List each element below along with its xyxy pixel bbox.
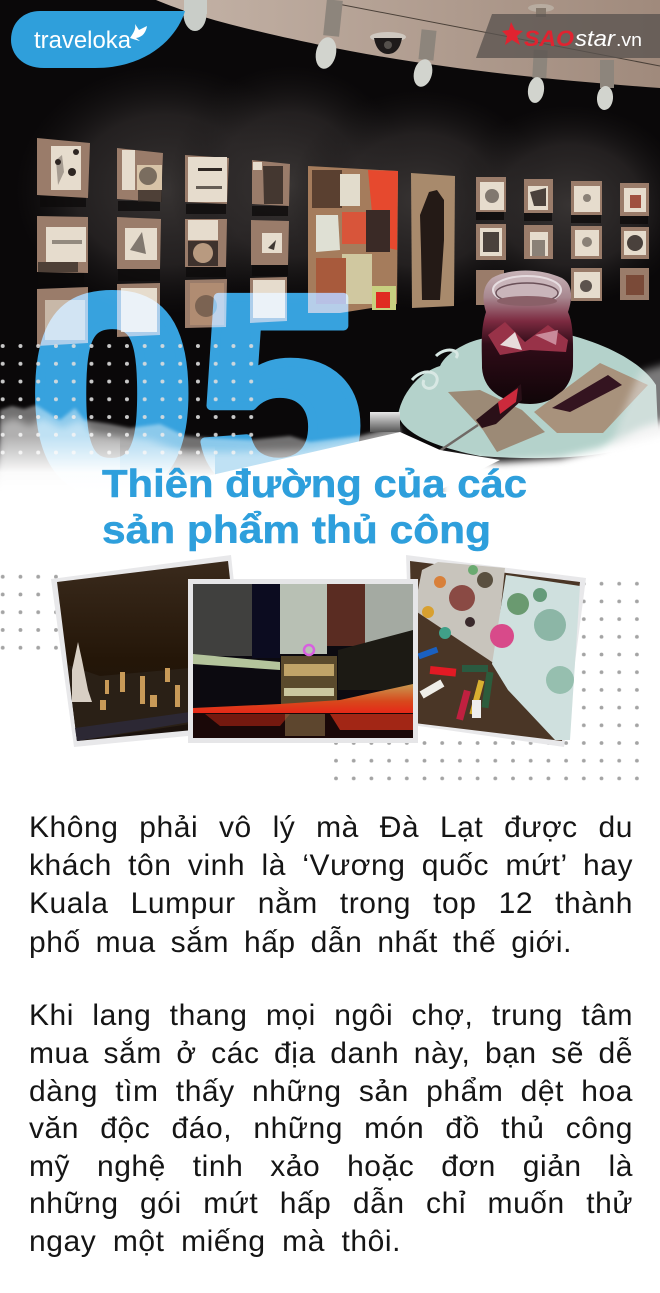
gallery wall background [0, 0, 660, 510]
plate rim swirl [412, 350, 457, 388]
photo: shopping mall with fountain at night [188, 579, 418, 743]
SAOstar logo: star [575, 26, 617, 51]
jam jar [482, 270, 573, 404]
body paragraph 1: phố mua sắm hấp dẫn nhất thế giới. [29, 926, 572, 959]
title: Thiên đường của các [102, 463, 527, 506]
big number 05: 05 [28, 238, 364, 550]
grey dot grid, middle left [0, 570, 70, 655]
body paragraph 1: Kuala Lumpur nằm trong top 12 thành [29, 887, 633, 920]
large collage painting [308, 166, 398, 313]
SAOstar logo: SAO [524, 26, 574, 51]
body paragraph 2: mua sắm ở các địa danh này, bạn sẽ dễ [29, 1037, 633, 1070]
body paragraph 2: ngay một miếng mà thôi. [29, 1225, 401, 1258]
jam spoon [432, 384, 522, 456]
body paragraph 1 [29, 811, 633, 959]
body paragraph 1: khách tôn vinh là ‘Vương quốc mứt’ hay [29, 849, 633, 882]
title [102, 463, 527, 552]
body paragraph 2: Khi lang thang mọi ngôi chợ, trung tâm [29, 999, 633, 1032]
jam toast pieces [448, 363, 648, 452]
wall paintings [37, 138, 649, 346]
SAOstar logo [476, 14, 660, 58]
photo: Kuala Lumpur skyline at night [51, 555, 250, 747]
body paragraph 2: văn độc đáo, những món đồ thủ công [29, 1112, 633, 1145]
white dot grid, top left [0, 338, 258, 463]
gallery ceiling [156, 0, 660, 88]
body paragraph 2: những gói mứt hấp dẫn chỉ muốn thử [29, 1187, 633, 1220]
grey dot grid, right side [327, 575, 645, 787]
Traveloka logo [11, 11, 185, 68]
ceiling track lights and camera [184, 0, 660, 111]
photo: painting supplies [406, 555, 586, 747]
Traveloka logo: traveloka [34, 27, 132, 54]
body paragraph 1: Không phải vô lý mà Đà Lạt được du [29, 811, 633, 844]
body paragraph 2: dàng tìm thấy những sản phẩm dệt hoa [29, 1075, 633, 1108]
SAOstar logo: .vn [616, 30, 642, 50]
plate [398, 330, 658, 458]
tall figure painting [411, 173, 455, 308]
title: sản phẩm thủ công [102, 509, 491, 552]
body paragraph 2: mỹ nghệ tinh xảo hoặc đơn giản là [29, 1150, 633, 1183]
mist fog [0, 360, 660, 532]
